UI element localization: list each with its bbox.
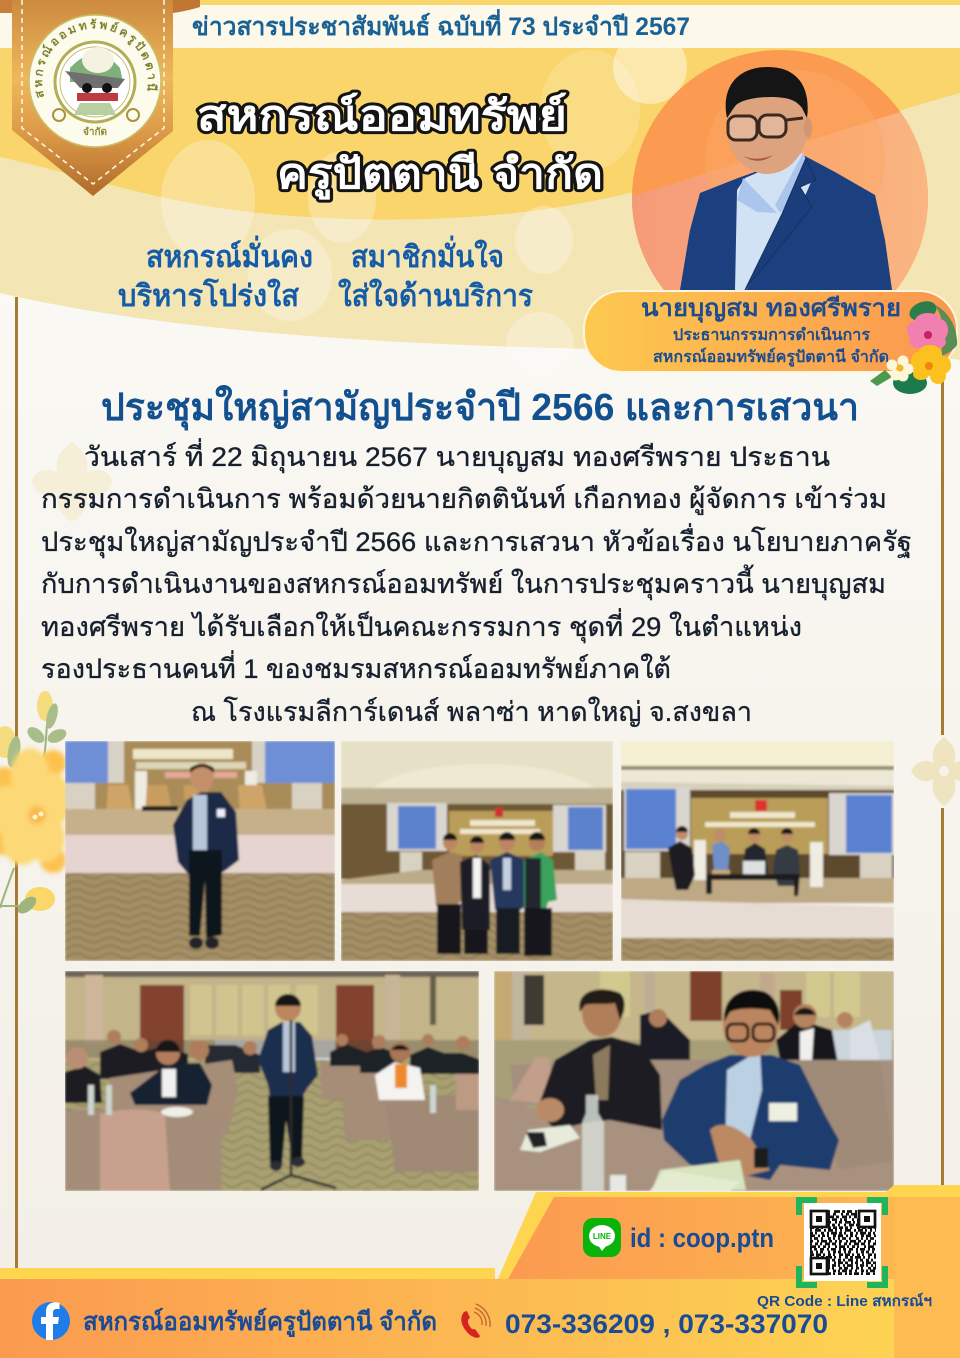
back row of people left	[100, 1044, 188, 1079]
tropical flowers	[870, 298, 957, 394]
body paragraph: วันเสาร์ ที่ 22 มิถุนายน 2567 นายบุญสม ทองศรีพราย ประธาน	[84, 438, 830, 474]
head	[726, 76, 808, 174]
faint ornament left	[32, 442, 112, 522]
LINE contact	[583, 1218, 774, 1257]
section heading: ประชุมใหญ่สามัญประจำปี 2566 และการเสวนา	[101, 385, 859, 431]
icon: LINE	[583, 1218, 621, 1257]
shirt	[735, 153, 812, 290]
man right	[662, 1055, 839, 1180]
name plate: ประธานกรรมการดำเนินการ	[673, 326, 870, 344]
man left	[537, 1037, 662, 1130]
motto: สมาชิกมั่นใจ	[351, 235, 504, 274]
main organisation title: สหกรณ์ออมทรัพย์	[197, 92, 567, 139]
collar	[737, 153, 812, 213]
logo emblem: จำกัด	[83, 126, 107, 138]
header background waves	[0, 0, 960, 376]
motto: บริหารโปร่งใส	[118, 277, 300, 313]
footer background	[0, 1185, 960, 1358]
name plate: นายบุญสม ทองศรีพราย	[641, 295, 901, 324]
top title strip	[173, 5, 960, 48]
motto: สหกรณ์มั่นคง	[146, 235, 313, 274]
icon: Facebook	[32, 1302, 70, 1340]
telephone contact: 073-336209 , 073-337070	[505, 1309, 828, 1339]
tables left	[110, 1060, 238, 1135]
photo 5: two men seated at table	[494, 971, 894, 1193]
photo 3: panel discussion on stage	[621, 741, 894, 961]
flower decoration left	[0, 691, 70, 917]
bottle and papers	[582, 1095, 604, 1193]
top title strip: ข่าวสารประชาสัมพันธ์ ฉบับที่ 73 ประจำปี 2567	[192, 9, 690, 41]
body paragraph: รองประธานคนที่ 1 ของชมรมสหกรณ์ออมทรัพย์ภาคใต้	[41, 650, 671, 684]
QR caption: QR Code : Line สหกรณ์ฯ	[757, 1292, 932, 1310]
president portrait	[632, 50, 928, 290]
icon: LINE: LINE	[593, 1232, 612, 1241]
name plate: สหกรณ์ออมทรัพย์ครูปัตตานี จำกัด	[653, 347, 889, 368]
motto	[118, 235, 533, 313]
body paragraph: กรรมการดำเนินการ พร้อมด้วยนายกิตตินันท์ เกือกทอง ผู้จัดการ เข้าร่วม	[41, 483, 887, 515]
tables right	[320, 1062, 362, 1100]
main organisation title: ครูปัตตานี จำกัด	[277, 150, 603, 200]
glasses	[728, 115, 803, 140]
jacket	[680, 155, 892, 290]
body paragraph	[41, 438, 912, 727]
ribbon badge with logo	[12, 0, 200, 196]
Facebook contact: สหกรณ์ออมทรัพย์ครูปัตตานี จำกัด	[83, 1307, 437, 1338]
photo 2: group of four men	[341, 741, 613, 961]
name plate	[584, 291, 957, 372]
LINE contact: id : coop.ptn	[630, 1223, 774, 1253]
main organisation title	[197, 92, 603, 200]
logo emblem	[28, 14, 162, 148]
lapel	[745, 158, 816, 290]
frame lines	[15, 297, 944, 1268]
QR code	[799, 1200, 885, 1285]
table	[494, 1096, 582, 1191]
Facebook contact	[32, 1302, 437, 1340]
body paragraph: กับการดำเนินงานของสหกรณ์ออมทรัพย์ ในการประชุมคราวนี้ นายบุญสม	[41, 564, 886, 601]
flower ornament right	[911, 737, 960, 806]
icon: phone	[461, 1304, 490, 1338]
body paragraph: ทองศรีพราย ได้รับเลือกให้เป็นคณะกรรมการ ชุดที่ 29 ในตำแหน่ง	[41, 608, 802, 644]
photo 4: president speaking at microphone	[65, 971, 479, 1191]
photo 1: president on stage floor	[65, 741, 335, 961]
logo emblem: สหกรณ์ออมทรัพย์ครูปัตตานี	[35, 18, 158, 98]
body paragraph: ณ โรงแรมลีการ์เดนส์ พลาซ่า หาดใหญ่ จ.สงขลา	[191, 696, 752, 727]
motto: ใส่ใจด้านบริการ	[338, 278, 533, 313]
standing speaker	[258, 1022, 318, 1098]
body paragraph: ประชุมใหญ่สามัญประจำปี 2566 และการเสวนา หัวข้อเรื่อง นโยบายภาครัฐ	[41, 523, 912, 559]
